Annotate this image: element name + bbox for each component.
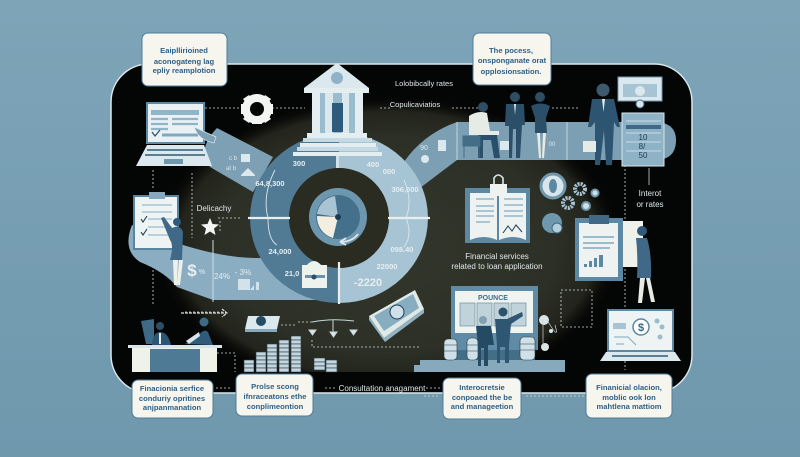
ribbon dividers xyxy=(457,122,567,160)
heading: Delicachy label with star xyxy=(197,204,242,235)
icon: arrow xyxy=(181,309,227,317)
ring values: 24,000 xyxy=(269,247,291,256)
icon: service desk with people xyxy=(128,318,222,372)
text: interest rates: or rates xyxy=(636,200,664,209)
upper-right ribbon xyxy=(400,122,676,188)
ribbon small icons: 00 xyxy=(549,142,556,148)
ring: dark left half xyxy=(250,133,339,303)
person seated xyxy=(463,102,500,158)
icon: coins and gears cluster xyxy=(541,174,598,233)
icon: rate table card: 50 xyxy=(639,151,648,160)
ring values xyxy=(255,159,419,289)
icon: bank building xyxy=(293,63,382,168)
icon: scales xyxy=(309,320,357,337)
pie center xyxy=(309,188,367,246)
icon: connected nodes xyxy=(539,315,556,351)
callout: bottom 4: moblic ook lon xyxy=(602,393,656,402)
ring values: 22000 xyxy=(377,262,397,271)
callout: bottom 3: and manageetion xyxy=(451,402,514,411)
ring: light right half xyxy=(339,133,428,303)
callout: bottom 4: Finanicial olacion, xyxy=(596,383,662,392)
ribbon text: dollars and percents xyxy=(187,240,259,302)
callout: bottom 2 xyxy=(236,374,313,416)
callout: bottom 1: Finacionia serfice xyxy=(140,384,204,393)
ring values: 000 xyxy=(383,167,395,176)
donut chart xyxy=(248,133,430,304)
ring values: 64,8,300 xyxy=(255,179,285,188)
callout: top right: opplosionsation. xyxy=(481,67,541,76)
callout: bottom 4 xyxy=(586,374,672,418)
ribbon small icons: c b xyxy=(229,156,238,162)
callout: bottom 1: anjpanmanation xyxy=(143,403,201,412)
label: applications: Copulicaviatios xyxy=(390,100,440,109)
ring arcs and ticks xyxy=(248,218,430,304)
ribbon text: dollars and percents: 24% xyxy=(214,272,230,281)
heading: Delicachy label with star: Delicachy xyxy=(197,204,231,213)
callout: bottom 2: ifnraceatons ethe xyxy=(244,392,306,401)
label: loan rates: Lolobibcally rates xyxy=(395,79,453,88)
callout: top left: Eaipllirioined xyxy=(160,46,208,55)
callout: bottom 3: Interocretsie xyxy=(459,383,505,392)
callout: bottom 1: conduriy opritines xyxy=(139,394,205,403)
ribbon small icons xyxy=(226,140,556,176)
icon: rate table card: 10 xyxy=(639,133,648,142)
callout: top right: onsponganate orat xyxy=(478,56,547,65)
panel: dark main panel xyxy=(111,64,692,393)
callout: bottom 3 xyxy=(443,378,521,419)
ring values: 098.40 xyxy=(391,245,413,254)
callout: top left: epliy reamplotion xyxy=(153,66,216,75)
person standing man xyxy=(505,92,525,158)
icon: banknotes stack xyxy=(369,290,424,342)
icon: laptop with dollar xyxy=(600,310,681,361)
ring values: 400 xyxy=(367,160,379,169)
icon: cash stack with stacked coins xyxy=(244,316,337,372)
icon: banknote xyxy=(618,77,662,108)
icon: rate table card: 8/ xyxy=(639,142,646,151)
callout: bottom 4: mahtlena mattiom xyxy=(597,402,662,411)
callout: top right xyxy=(473,33,551,85)
callout: top left: aconogateng lag xyxy=(154,57,215,66)
icon: report clipboard with woman xyxy=(575,215,655,303)
icon: briefcase xyxy=(302,261,327,288)
icon: clipboard with woman xyxy=(134,192,183,285)
connector lines xyxy=(153,108,625,396)
ring values: 300 xyxy=(293,159,305,168)
text: Financial services label: Financial services xyxy=(465,252,529,261)
person with briefcase xyxy=(583,84,620,165)
person standing woman xyxy=(531,92,550,158)
text: Financial services label: related to loan application xyxy=(451,262,543,271)
text: interest rates xyxy=(636,168,664,209)
icon: open book with lock xyxy=(465,175,530,243)
ring values: -2220 xyxy=(354,277,382,289)
text: interest rates: Interot xyxy=(639,189,662,198)
text: Financial services label xyxy=(451,252,543,271)
upper-left ribbon xyxy=(204,128,273,192)
icon: gear xyxy=(241,95,273,124)
ribbon text: dollars and percents: - 3% xyxy=(235,268,251,277)
label: consultation: Consultation anagament xyxy=(339,384,426,393)
ring values: 306,000 xyxy=(391,185,419,194)
ribbon small icons: 90 xyxy=(420,145,428,152)
callout: top right: The pocess, xyxy=(489,46,533,55)
lower-left ribbon xyxy=(128,225,342,300)
callout: bottom 3: conpoaed the be xyxy=(452,393,512,402)
callout: bottom 2: Prolse scong xyxy=(251,382,299,391)
icon: dashboard board with two people: POUNCE xyxy=(478,295,508,302)
callout: bottom 2: conplimeontion xyxy=(247,402,304,411)
people on ribbon xyxy=(463,84,620,165)
icon: dashboard board with two people xyxy=(414,286,565,372)
ribbon text: dollars and percents: $ xyxy=(187,261,197,280)
icon: laptop with form xyxy=(136,103,216,166)
ring values: 21,0 xyxy=(285,269,299,278)
callout: top left xyxy=(142,33,227,86)
ribbon small icons: at b xyxy=(226,166,237,172)
ribbon text: dollars and percents: % xyxy=(199,269,205,276)
icon: rate table card xyxy=(622,113,664,166)
callout: bottom 1 xyxy=(132,380,213,418)
icon: laptop with dollar: $ xyxy=(638,322,644,334)
